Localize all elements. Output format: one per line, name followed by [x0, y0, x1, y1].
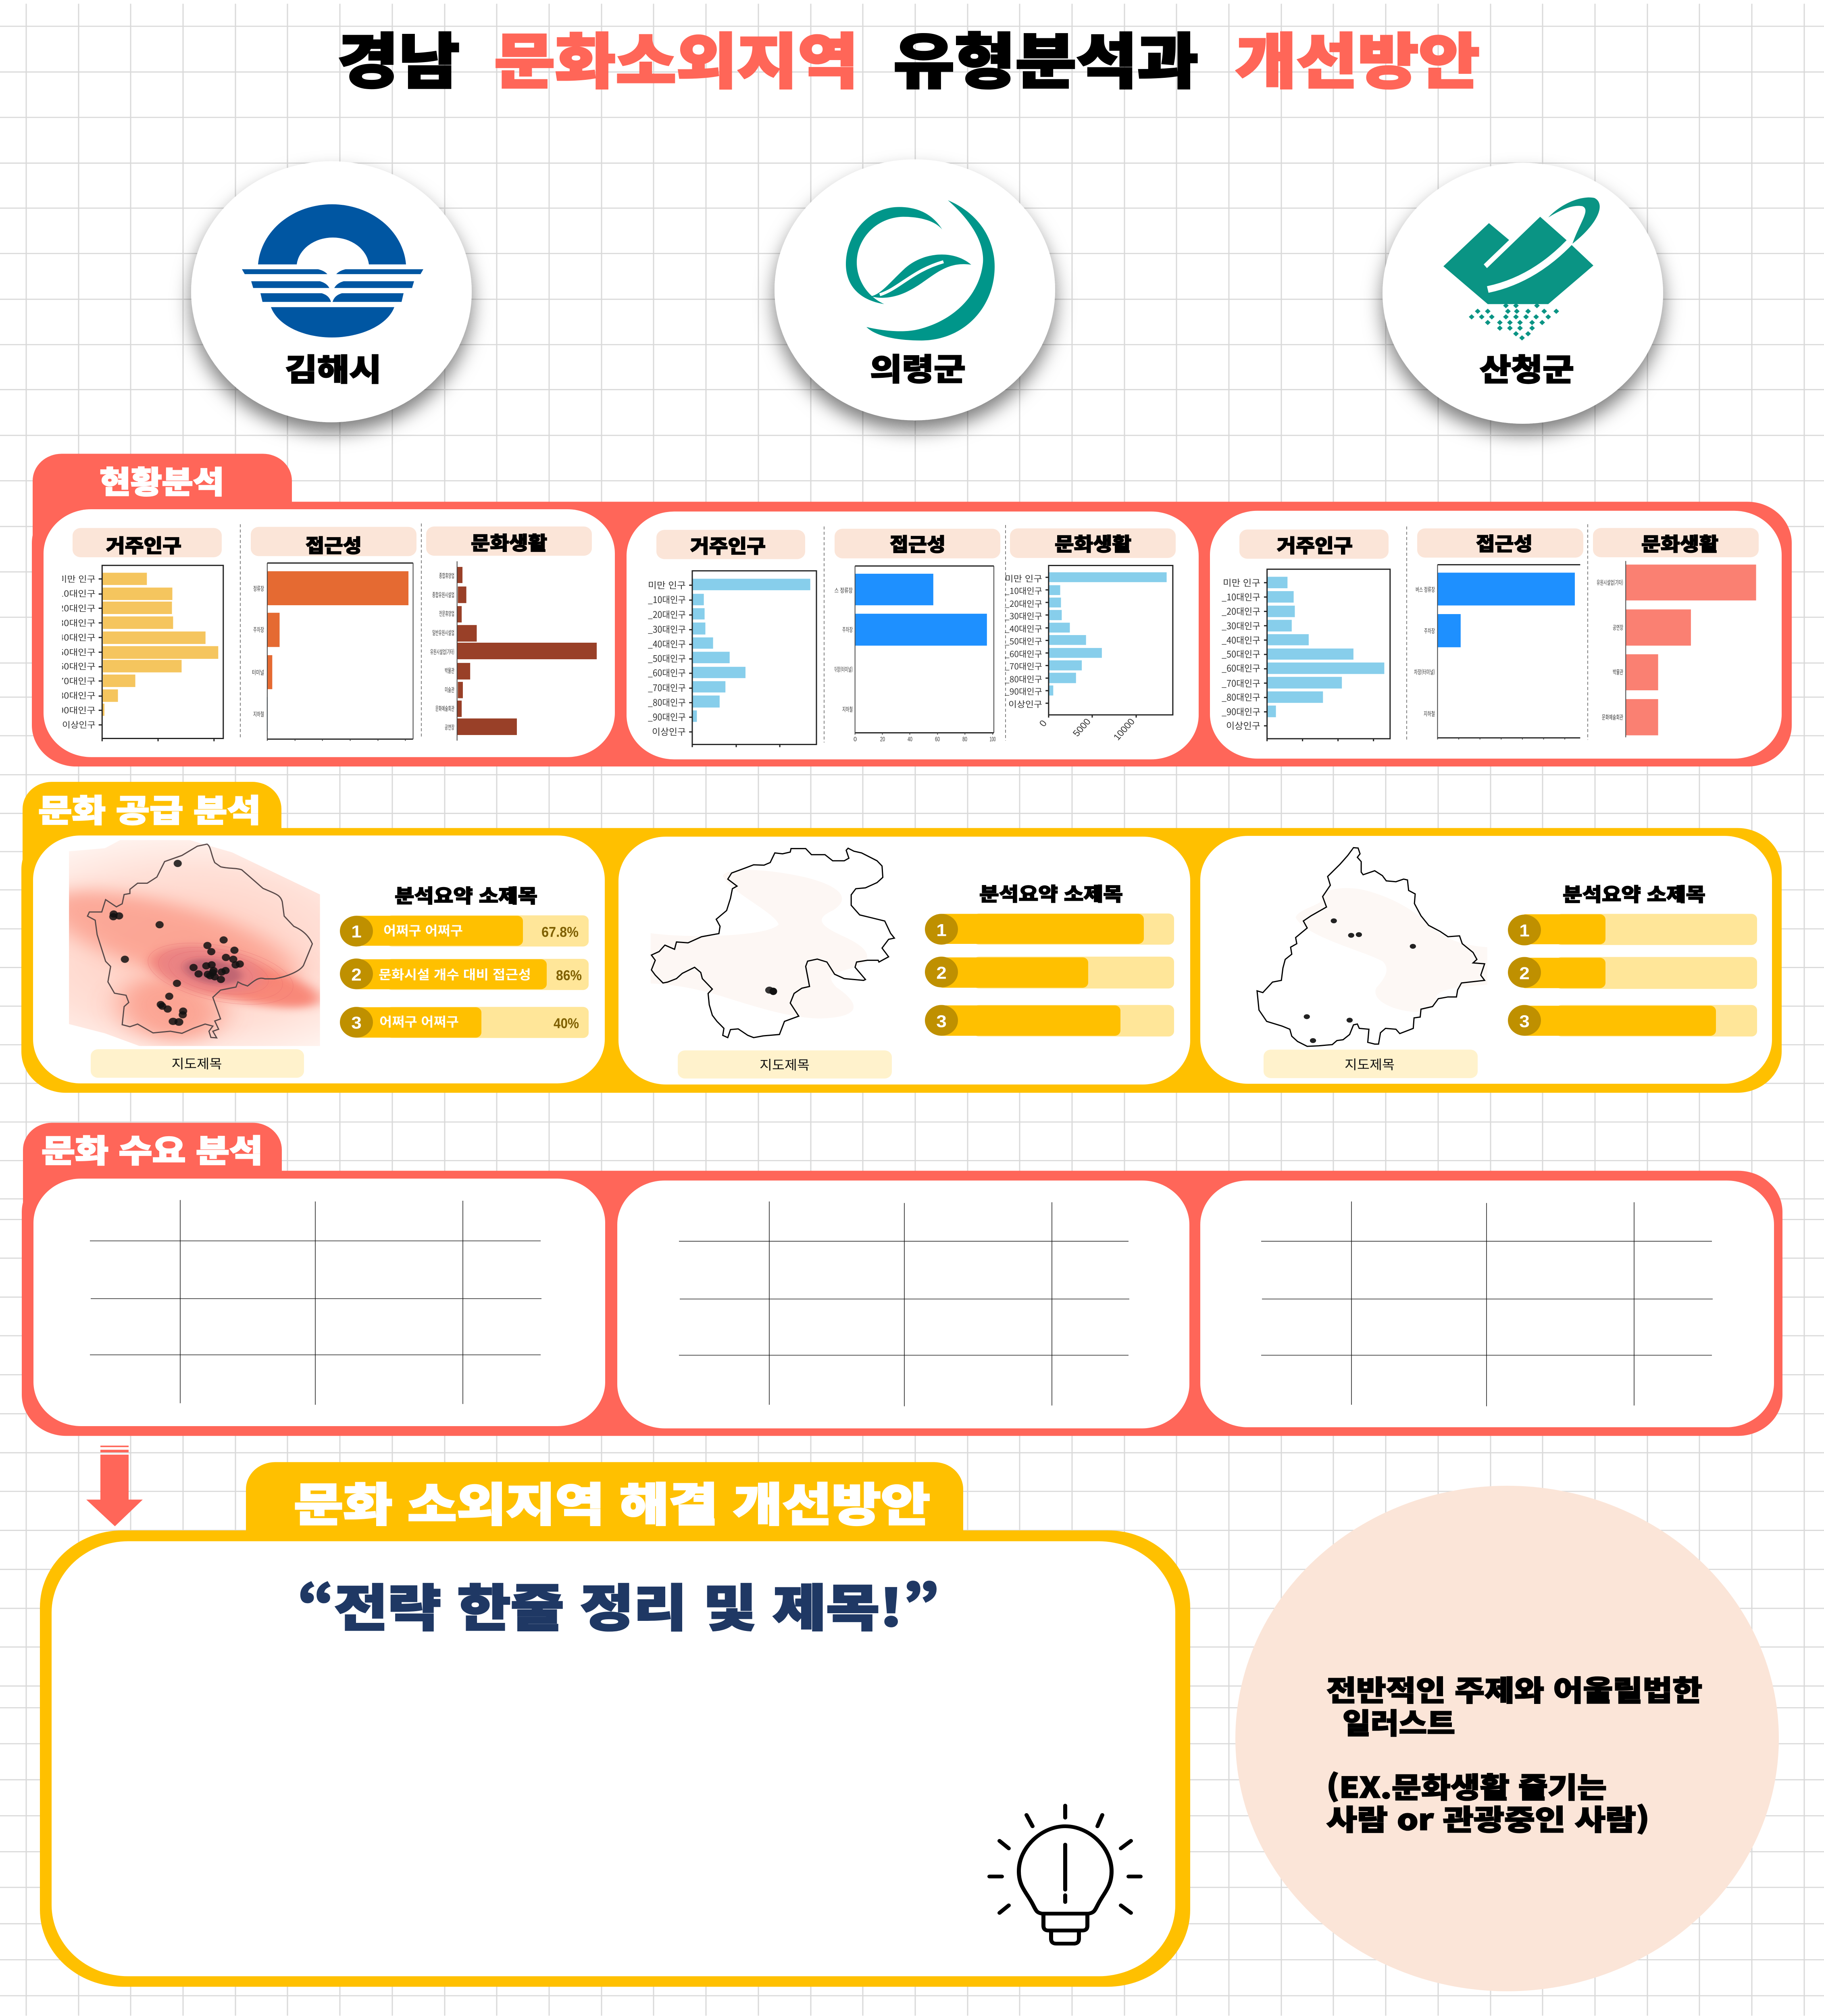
chart: 거주인구: _90대인구 [1222, 705, 1260, 718]
badge: 김해시 [191, 161, 472, 422]
chart: 문화생활 [1597, 561, 1756, 737]
bar row 3: 3 [1519, 1012, 1530, 1031]
icon: 의령군 logo [846, 200, 995, 340]
subheading: 분석요약 소제목 [1563, 879, 1705, 906]
bar row 3 [340, 1007, 589, 1038]
chart: 접근성: 60 [935, 736, 940, 743]
chart: 거주인구: 60대인구 [58, 660, 96, 672]
heading: 문화 수요 분석: 문화 수요 분석 [42, 1126, 263, 1171]
bar row 1 [340, 915, 589, 946]
chart: 거주인구 (우측): 미만 인구 [1005, 572, 1042, 584]
chart: 접근성: 지하철 [253, 710, 264, 718]
heading: 문화생활 [1593, 528, 1759, 557]
chart: 접근성: 버스 정류장 [830, 586, 853, 594]
chart: 접근성 [830, 566, 996, 743]
subheading: 분석요약 소제목 [979, 879, 1123, 906]
chart: 접근성: 20 [880, 736, 885, 743]
panel: 의령군 수요 표 [617, 1181, 1189, 1429]
chart: 거주인구: _30대인구 [648, 622, 686, 635]
chart: 거주인구 [648, 571, 816, 747]
chart: 거주인구 (우측): _90대인구 [1005, 685, 1042, 697]
bar row 3 [1508, 1005, 1757, 1037]
illustration placeholder circle [1235, 1486, 1779, 1991]
map title: 지도제목 [172, 1054, 222, 1072]
chart: 거주인구 [58, 565, 223, 741]
heading: 문화생활: 문화생활 [1055, 529, 1131, 556]
bar row 3 [925, 1005, 1174, 1037]
chart: 문화생활: 전문휴양업 [439, 609, 454, 618]
bar row 2: 2 [936, 964, 947, 983]
chart: 거주인구: 70대인구 [58, 675, 96, 687]
badge: 의령군 [775, 159, 1055, 421]
chart: 거주인구 (우측): 5000 [1070, 716, 1093, 738]
chart: 접근성: 차장(터미널) [1414, 668, 1435, 676]
bar row 1: 1 [936, 921, 947, 940]
heading: 접근성: 접근성 [890, 529, 945, 557]
heading: 거주인구 [1239, 529, 1389, 559]
chart: 거주인구: 50대인구 [58, 646, 96, 658]
chart: 문화생활: 유원시설업(기타) [430, 648, 454, 656]
chart: 접근성: 100 [990, 736, 996, 743]
chart: 거주인구: 미만 인구 [1223, 576, 1260, 589]
bar row 2 [925, 957, 1174, 989]
chart: 거주인구 (우측) [1005, 565, 1173, 742]
chart: 거주인구: _40대인구 [648, 637, 686, 650]
bar row 2: 문화시설 개수 대비 접근성 [379, 965, 531, 983]
bar row 1 [925, 914, 1174, 945]
placeholder text [1326, 1668, 1702, 1839]
bar row 1 [1508, 914, 1757, 946]
bar row 2: 2 [1519, 964, 1530, 983]
chart: 접근성: 주차장 [842, 625, 853, 634]
heading: 문화생활: 문화생활 [1641, 529, 1718, 556]
placeholder text: 사람 or 관광중인 사람) [1326, 1797, 1649, 1839]
map title [678, 1050, 892, 1079]
panel: 김해시 현황 [44, 509, 615, 757]
placeholder text: 일러스트 [1343, 1701, 1455, 1742]
icon: light bulb [989, 1806, 1141, 1943]
chart: 거주인구: _90대인구 [648, 710, 686, 723]
chart: 거주인구 (우측): _70대인구 [1005, 660, 1042, 672]
chart: 문화생활: 유원시설업(기타) [1597, 578, 1623, 587]
bar row 3: 3 [936, 1012, 947, 1031]
chart: 문화생활: 일반유원시설업 [432, 628, 454, 637]
chart: 거주인구 (우측): _50대인구 [1005, 635, 1042, 647]
panel: 김해시 수요 표 [33, 1179, 605, 1426]
panel: 전략 [52, 1541, 1175, 1976]
bar row 1: 1 [351, 923, 362, 941]
bar row 3: 3 [351, 1014, 362, 1033]
heading: 문화 소외지역 해결 개선방안 [294, 1468, 930, 1534]
chart: 거주인구: _70대인구 [648, 681, 686, 694]
bar row 2: 2 [351, 966, 362, 985]
chart: 거주인구 (우측): 10000 [1111, 716, 1137, 742]
heading: 접근성 [251, 527, 416, 558]
chart: 거주인구 [1222, 569, 1390, 741]
chart: 접근성: 주차장 [253, 625, 264, 634]
title [337, 14, 1480, 100]
heading: 문화생활 [426, 527, 592, 556]
map title [91, 1049, 304, 1078]
chart: 거주인구: _60대인구 [648, 666, 686, 679]
chart: 거주인구 (우측): 0 [1037, 718, 1049, 729]
bar row 1: 어쩌구 어쩌구 [383, 921, 463, 939]
chart: 거주인구 (우측): _20대인구 [1005, 598, 1042, 610]
map title: 지도제목 [760, 1055, 810, 1073]
chart: 거주인구: _60대인구 [1222, 661, 1260, 674]
chart: 문화생활: 미술관 [445, 685, 454, 694]
bar row 3: 어쩌구 어쩌구 [379, 1012, 459, 1030]
chart: 거주인구: _80대인구 [1222, 690, 1260, 703]
heading: 거주인구: 거주인구 [106, 531, 181, 558]
map: 의령군 지도 [651, 848, 894, 1037]
chart: 거주인구: _70대인구 [1222, 676, 1260, 689]
chart: 접근성: 지하철 [1424, 709, 1435, 718]
section: 문화 수요 분석 [22, 1123, 1782, 1436]
panel: 산청군 수요 표 [1200, 1181, 1774, 1427]
chart: 거주인구: 80대인구 [58, 689, 96, 701]
panel: 산청군 공급 [1200, 836, 1772, 1084]
strategy title: “전략 한줄 정리 및 제목!” [298, 1568, 939, 1641]
chart: 거주인구: 미만 인구 [648, 578, 686, 591]
icon: 산청군 logo [1443, 198, 1600, 340]
placeholder text: 전반적인 주제와 어울릴법한 [1326, 1668, 1702, 1709]
chart: 거주인구: _40대인구 [1222, 633, 1260, 646]
heading: 거주인구 [656, 530, 805, 559]
heading: 접근성 [1417, 528, 1583, 558]
chart: 거주인구: _10대인구 [648, 593, 686, 606]
chart: 접근성: 주차장 [1424, 627, 1435, 635]
badge: 산청군 [1383, 163, 1663, 424]
chart: 접근성: 버스 정류장 [1416, 585, 1435, 594]
chart: 문화생활: 문화예술회관 [435, 704, 454, 712]
title: 개선방안 [1235, 14, 1480, 100]
bar row 1: 67.8% [541, 924, 579, 940]
chart: 문화생활: 문화예술회관 [1602, 712, 1623, 721]
bar row 2 [1508, 957, 1757, 989]
heading: 거주인구: 거주인구 [690, 531, 766, 558]
chart: 거주인구: _20대인구 [648, 608, 686, 621]
heading: 접근성: 접근성 [1476, 529, 1532, 556]
chart: 거주인구: _50대인구 [648, 652, 686, 664]
chart: 문화생활: 공연장 [1613, 623, 1623, 631]
chart: 거주인구 (우측): _80대인구 [1005, 673, 1042, 685]
chart: 거주인구: 20대인구 [58, 602, 96, 614]
panel: 김해시 공급 [19, 835, 605, 1083]
chart: 거주인구 (우측): _30대인구 [1005, 610, 1042, 622]
bar row 2: 86% [556, 967, 582, 983]
panel: 산청군 현황 [1210, 511, 1782, 759]
map: 산청군 지도 [1257, 848, 1487, 1046]
title: 유형분석과 [893, 14, 1198, 100]
bar row 3: 40% [554, 1015, 579, 1031]
chart: 거주인구: 90대인구 [58, 704, 96, 716]
chart: 거주인구: _10대인구 [1222, 590, 1260, 603]
chart: 거주인구: _50대인구 [1222, 647, 1260, 660]
chart: 거주인구: 미만 인구 [58, 573, 96, 585]
arrow [86, 1445, 143, 1526]
heading: 현황분석: 현황분석 [100, 457, 224, 502]
section: 문화 공급 분석 [19, 782, 1782, 1093]
map: 김해시 밀도 지도 [19, 840, 334, 1049]
chart: 거주인구: 40대인구 [58, 631, 96, 643]
chart: 문화생활: 종합휴양업 [439, 571, 454, 580]
chart: 접근성 [1414, 565, 1580, 739]
chart: 거주인구 (우측): _60대인구 [1005, 648, 1042, 660]
title: 경남 [337, 14, 460, 100]
panel: 의령군 현황 [627, 512, 1199, 759]
chart: 접근성: 지하철 [842, 705, 853, 713]
bar row 1: 1 [1519, 921, 1530, 940]
heading: 문화생활 [1010, 528, 1176, 558]
chart: 거주인구: _80대인구 [648, 695, 686, 708]
badge: 산청군: 산청군 [1480, 345, 1574, 389]
chart: 접근성: 40 [908, 736, 912, 743]
chart: 거주인구 (우측): 이상인구 [1008, 698, 1042, 710]
chart: 거주인구: _30대인구 [1222, 619, 1260, 632]
chart: 접근성 [252, 563, 413, 741]
title: 문화소외지역 [494, 14, 858, 100]
panel: 의령군 공급 [618, 837, 1190, 1085]
heading: 접근성: 접근성 [306, 531, 362, 558]
chart: 거주인구: 30대인구 [58, 616, 96, 629]
chart: 문화생활: 박물관 [445, 666, 454, 675]
chart: 접근성: 0 [854, 736, 857, 743]
section: 문화 소외지역 해결 개선방안 [40, 1462, 1190, 1987]
chart: 거주인구: _20대인구 [1222, 604, 1260, 617]
heading: 문화 공급 분석: 문화 공급 분석 [38, 785, 261, 831]
heading: 문화생활: 문화생활 [471, 528, 547, 555]
chart: 문화생활 [430, 561, 597, 741]
bar row 2 [340, 958, 589, 990]
chart: 거주인구: 10대인구 [58, 587, 96, 599]
placeholder text: (EX.문화생활 즐기는 [1326, 1765, 1607, 1806]
chart: 거주인구 (우측): _40대인구 [1005, 623, 1042, 635]
chart: 접근성: 주차장(터미널) [830, 665, 853, 674]
heading: 거주인구: 거주인구 [1277, 531, 1353, 558]
map title: 지도제목 [1345, 1055, 1395, 1073]
heading: 접근성 [835, 529, 1000, 558]
subheading: 분석요약 소제목 [395, 881, 537, 908]
chart: 문화생활: 공연장 [445, 723, 454, 731]
badge: 의령군: 의령군 [870, 344, 966, 389]
chart: 접근성: 정류장 [253, 584, 264, 593]
chart: 접근성: 터미널 [252, 668, 264, 677]
chart: 거주인구: 이상인구 [62, 719, 96, 731]
icon: 김해시 logo [242, 204, 423, 337]
section: 현황분석 [32, 454, 1792, 766]
chart: 접근성: 80 [962, 736, 967, 743]
chart: 거주인구: 이상인구 [1226, 719, 1260, 732]
chart: 문화생활: 박물관 [1613, 668, 1623, 676]
heading: 거주인구 [73, 528, 222, 558]
chart: 거주인구: 이상인구 [652, 725, 686, 738]
map title [1264, 1050, 1478, 1078]
chart: 거주인구 (우측): _10대인구 [1005, 585, 1042, 597]
badge: 김해시: 김해시 [285, 345, 381, 389]
chart: 문화생활: 종합유원시설업 [432, 590, 454, 599]
